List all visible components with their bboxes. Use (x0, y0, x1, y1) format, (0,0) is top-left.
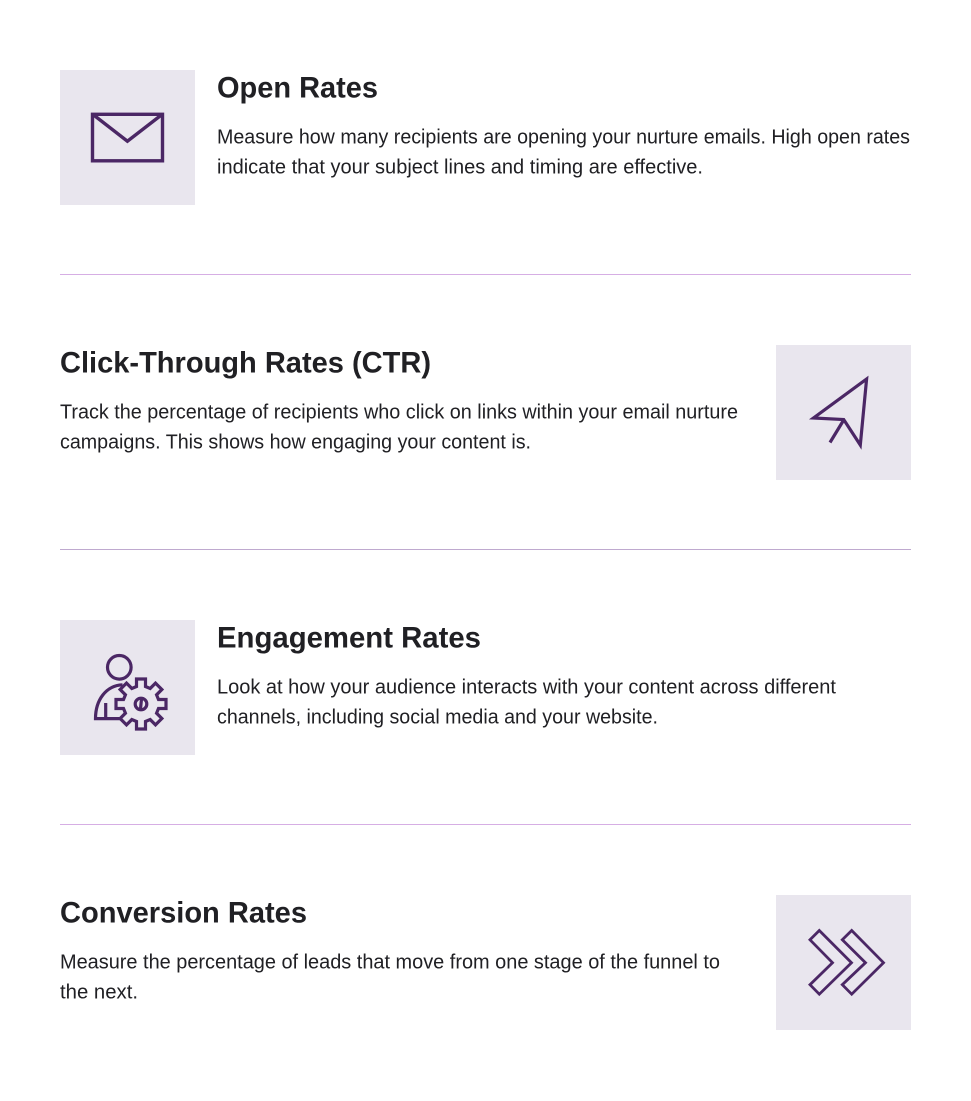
panel: open rates (60, 70, 910, 205)
heading: conversion rates: Conversion Rates (60, 896, 307, 930)
icon tile: cursor arrow (776, 345, 911, 480)
heading: open rates: Open Rates (217, 72, 378, 104)
body: open rates: Measure how many recipients are opening your nurture emails. High open rates (217, 126, 910, 148)
body: open rates (217, 126, 910, 178)
body: engagement rates: Look at how your audience interacts with your content across different (217, 676, 836, 698)
icon tile: double chevron (776, 895, 911, 1030)
body: engagement rates (217, 676, 836, 728)
body: conversion rates: Measure the percentage of leads that move from one stage of the funnel to (60, 952, 720, 974)
heading: click-through rates: Click-Through Rates (CTR) (60, 346, 431, 380)
body: conversion rates: the next. (60, 982, 138, 1004)
panel: engagement rates (60, 620, 836, 755)
body: click-through rates: campaigns. This shows how engaging your content is. (60, 432, 531, 454)
icon tile: person with gear (60, 620, 195, 755)
body: click-through rates: Track the percentage of recipients who click on links within your email nurture (60, 402, 738, 424)
panel: click-through rates (60, 345, 911, 480)
panel: conversion rates (60, 895, 911, 1030)
body: engagement rates: channels, including social media and your website. (217, 706, 658, 728)
icon tile: envelope (60, 70, 195, 205)
heading: engagement rates: Engagement Rates (217, 622, 481, 654)
body: open rates: indicate that your subject lines and timing are effective. (217, 156, 703, 178)
body: conversion rates (60, 952, 720, 1004)
body: click-through rates (60, 402, 738, 454)
